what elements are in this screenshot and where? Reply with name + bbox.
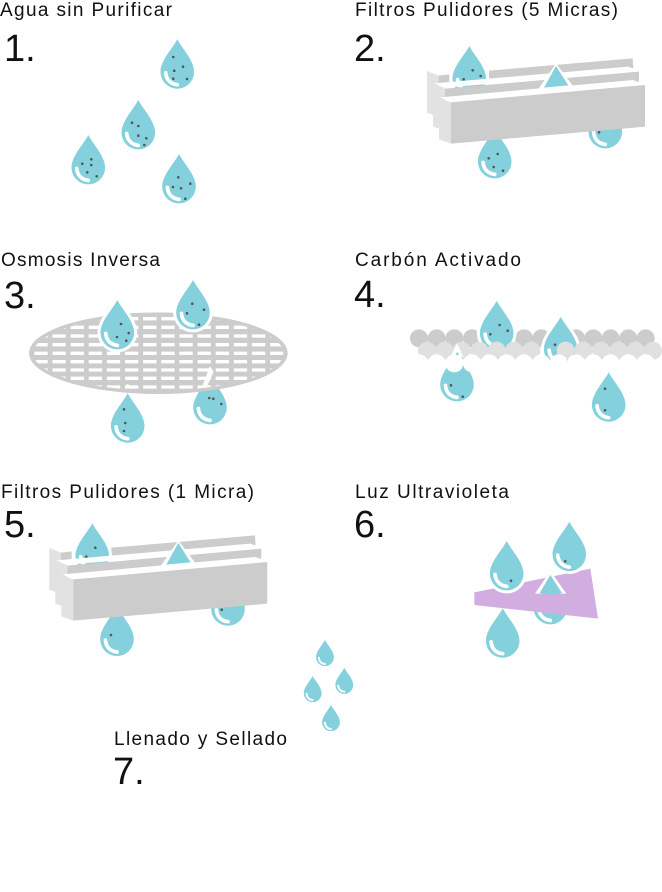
heading: step 1: Agua sin Purificar xyxy=(0,0,173,21)
panel: step 4 xyxy=(354,250,662,422)
illustration: four clean small drops xyxy=(304,640,353,731)
illustration: 1 micron polishing filter with drops xyxy=(49,523,267,656)
panel: step 1 xyxy=(0,0,196,203)
illustration: ultraviolet light beam with drops xyxy=(474,522,598,658)
panel: step 7 xyxy=(113,640,353,793)
heading: step 3: Osmosis Inversa xyxy=(1,250,160,271)
icon: water drop with impurities D xyxy=(162,154,196,203)
heading: step 2: Filtros Pulidores (5 Micras) xyxy=(355,0,618,21)
illustration: activated carbon layer with drops xyxy=(410,301,662,422)
panel: step 5 xyxy=(1,482,267,656)
number: step 4: 4. xyxy=(354,274,386,316)
heading: step 7: Llenado y Sellado xyxy=(114,729,287,750)
icon: water drop with impurities B xyxy=(122,100,155,149)
number: step 1: 1. xyxy=(4,28,36,70)
number: step 7: 7. xyxy=(113,751,145,793)
icon: water drop with impurities C xyxy=(72,135,105,184)
number: step 6: 6. xyxy=(354,504,386,546)
number: step 3: 3. xyxy=(4,275,36,317)
illustration: reverse osmosis membrane with drops xyxy=(29,280,288,443)
number: step 2: 2. xyxy=(354,28,386,70)
number: step 5: 5. xyxy=(4,504,36,546)
panel: step 2 xyxy=(354,0,645,178)
illustration: 5 micron polishing filter with drops xyxy=(427,46,645,178)
panel: step 6 xyxy=(354,482,598,658)
heading: step 5: Filtros Pulidores (1 Micra) xyxy=(1,482,254,503)
icon: water drop with impurities A xyxy=(160,39,194,89)
panel: step 3 xyxy=(1,250,288,443)
heading: step 6: Luz Ultravioleta xyxy=(355,482,509,503)
heading: step 4: Carbón Activado xyxy=(355,250,521,271)
